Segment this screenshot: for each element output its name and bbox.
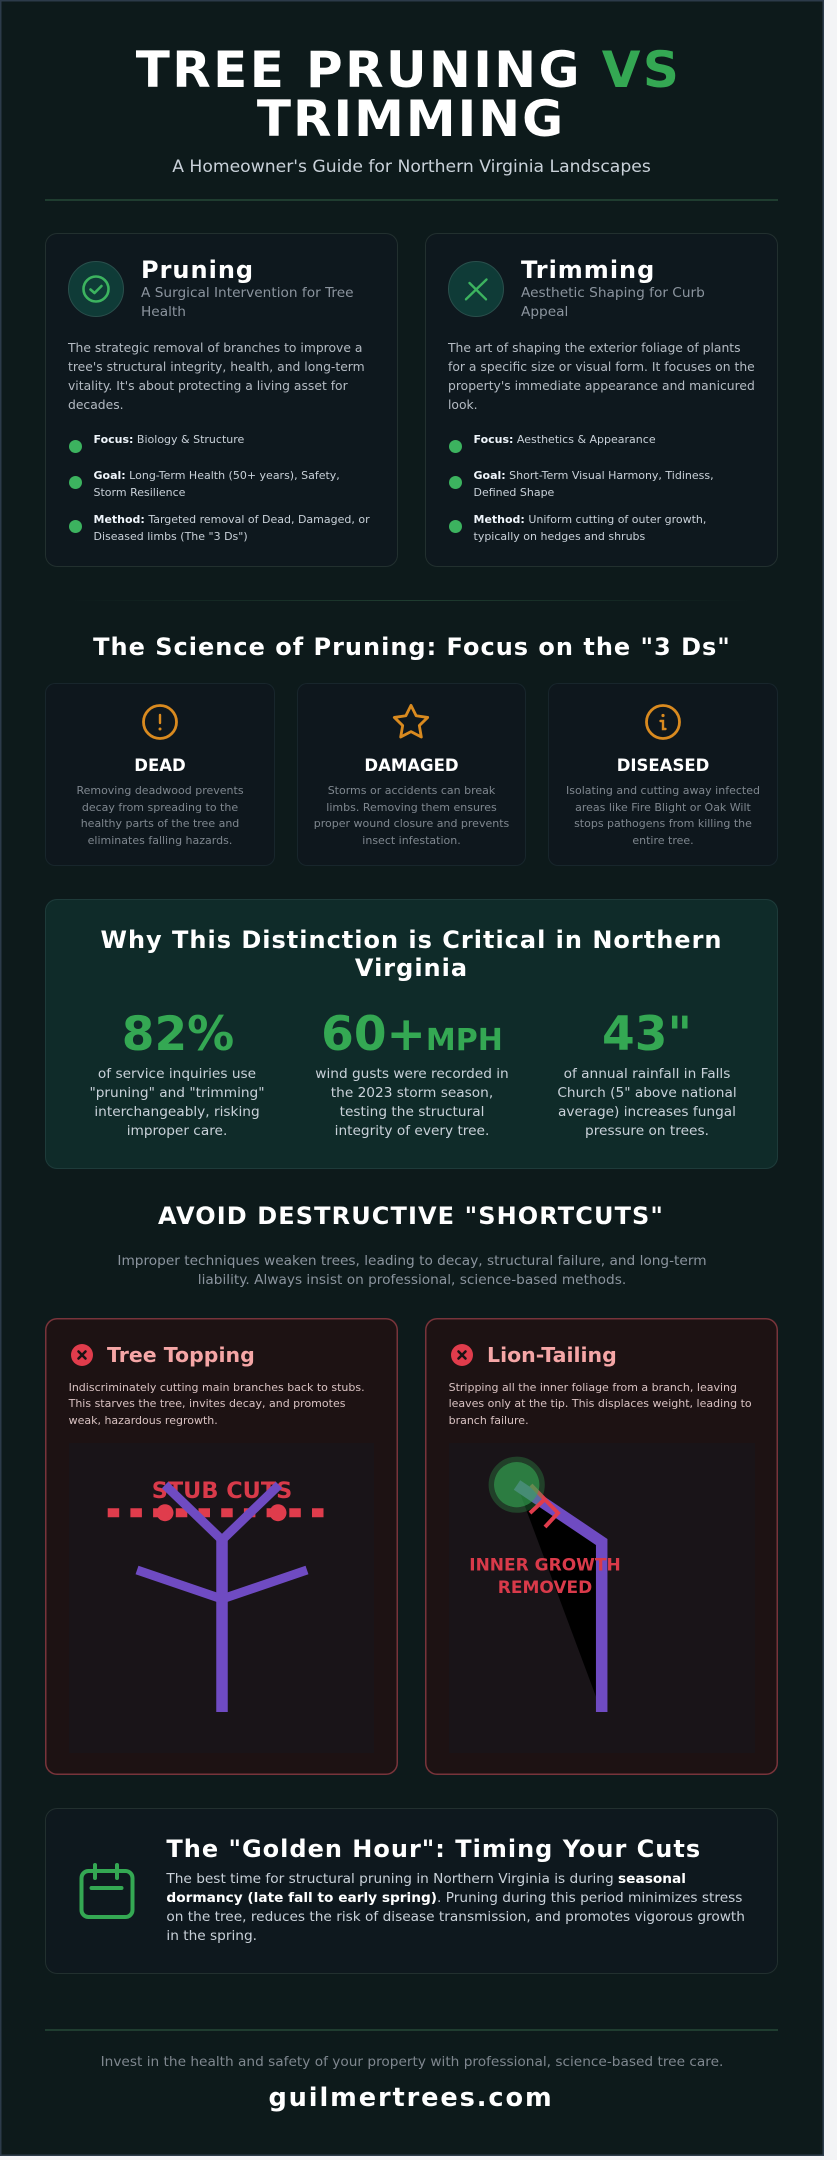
heading: the 3 Ds: The Science of Pruning: Focus on the "3 Ds" <box>93 633 731 661</box>
description: pruning: decades. <box>68 398 124 412</box>
description: diseased: stops pathogens from killing the <box>574 817 752 830</box>
bullet: focus: Focus: Biology & Structure <box>94 433 244 446</box>
bullet dot <box>68 440 82 453</box>
heading: critical: Virginia <box>355 954 468 982</box>
bullet: method: Method: Targeted removal of Dead, Damaged, or <box>94 513 370 526</box>
bullet: method <box>94 513 370 542</box>
description: lion-tailing: branch failure. <box>449 1414 529 1426</box>
icon: crossed shears <box>448 261 504 317</box>
stat caption: service inquiries: improper care. <box>127 1123 227 1139</box>
bullet: goal <box>94 469 340 498</box>
stat caption: annual rainfall: average) increases fungal <box>558 1104 736 1120</box>
panel: diseased <box>548 683 778 866</box>
bullet: method: typically on hedges and shrubs <box>474 530 645 542</box>
label: inner growth removed: INNER GROWTH <box>469 1556 621 1576</box>
description: dead: healthy parts of the tree and <box>81 817 239 830</box>
footer <box>101 2054 723 2113</box>
description: damaged <box>314 784 509 846</box>
description: dead: decay from spreading to the <box>82 800 238 814</box>
footer note: Invest in the health and safety of your property with professional, science-based tree care. <box>101 2054 723 2070</box>
title <box>136 41 681 148</box>
tagline: trimming: Appeal <box>521 304 568 320</box>
description: lion-tailing: Stripping all the inner foliage from a branch, leaving <box>449 1380 737 1394</box>
description: diseased <box>566 784 760 846</box>
heading: pruning: Pruning <box>141 256 254 284</box>
stat caption: annual rainfall: Church (5" above national <box>557 1085 737 1101</box>
description: diseased: entire tree. <box>632 834 694 846</box>
description: golden hour: The best time for structural pruning in Northern Virginia is during seasonal <box>166 1870 686 1886</box>
panel: pruning <box>45 233 398 567</box>
heading: critical <box>100 926 723 982</box>
heading: tree topping: Tree Topping <box>107 1343 255 1367</box>
stat: 82%: 82% <box>122 1006 234 1062</box>
heading: golden hour: The "Golden Hour": Timing Your Cuts <box>166 1835 701 1863</box>
description: tree topping: weak, hazardous regrowth. <box>69 1414 218 1426</box>
icon: star <box>392 704 430 738</box>
icon: alert circle <box>142 704 178 740</box>
heading: lion-tailing: Lion-Tailing <box>487 1343 617 1367</box>
icon: x circle <box>451 1344 473 1366</box>
heading: critical: Why This Distinction is Critical in Northern <box>100 926 723 954</box>
bullet: method: Diseased limbs (The "3 Ds") <box>94 530 248 542</box>
branch <box>517 1485 602 1712</box>
description: diseased: Isolating and cutting away infected <box>566 784 760 797</box>
cut marks <box>530 1485 558 1527</box>
bullet dot <box>448 520 462 532</box>
title: TRIMMING <box>257 90 565 148</box>
description: pruning <box>68 341 365 412</box>
description: golden hour: in the spring. <box>166 1928 257 1944</box>
icon: check circle <box>68 261 124 317</box>
description: dead: Removing deadwood prevents <box>76 784 244 797</box>
bullet dot <box>68 520 82 532</box>
description: damaged: limbs. Removing them ensures <box>326 800 497 814</box>
bullet: focus: Focus: Aesthetics & Appearance <box>474 433 656 446</box>
panel: dead <box>45 683 275 866</box>
panel: tree topping <box>45 1318 398 1775</box>
stat caption: annual rainfall <box>557 1066 737 1139</box>
description: dead <box>76 784 244 846</box>
description: tree topping: This starves the tree, invites decay, and promotes <box>69 1397 345 1410</box>
bullet dot <box>448 440 462 453</box>
panel: damaged <box>297 683 526 866</box>
description: diseased: areas like Fire Blight or Oak Wilt <box>575 800 751 814</box>
cut markers <box>156 1504 286 1521</box>
description: golden hour: dormancy (late fall to early spring). Pruning during this period minimizes stress <box>166 1890 742 1906</box>
stat caption: service inquiries: "pruning" and "trimming" <box>89 1085 265 1101</box>
label: diseased: DISEASED <box>617 756 709 775</box>
description: damaged: Storms or accidents can break <box>328 784 495 797</box>
stat: 60+ MPH: 60+MPH <box>321 1006 503 1062</box>
label: damaged: DAMAGED <box>364 756 459 775</box>
stat caption: wind gusts: integrity of every tree. <box>335 1123 489 1139</box>
intro text: avoid shortcuts <box>117 1253 707 1288</box>
description: trimming: look. <box>448 398 478 412</box>
panel: lion-tailing <box>425 1318 778 1775</box>
description: trimming: The art of shaping the exterior foliage of plants <box>448 341 741 355</box>
icon: info circle <box>645 704 681 740</box>
bullet: method: Method: Uniform cutting of outer growth, <box>474 513 706 526</box>
icon: x circle <box>71 1344 93 1366</box>
title: TREE PRUNING VS <box>136 41 681 99</box>
cut line <box>108 1508 324 1517</box>
website: guilmertrees.com <box>268 2083 554 2113</box>
stat: 43 inches: 43" <box>602 1006 692 1062</box>
tagline: pruning: A Surgical Intervention for Tree <box>141 285 354 301</box>
stat caption: wind gusts: wind gusts were recorded in <box>315 1066 509 1082</box>
stat caption: annual rainfall: pressure on trees. <box>585 1123 709 1139</box>
bullet: method <box>474 513 706 542</box>
label: stub cuts: STUB CUTS <box>152 1478 292 1504</box>
bullet: goal <box>474 469 714 498</box>
description: dead: eliminates falling hazards. <box>88 834 232 846</box>
bullet dot <box>68 476 82 488</box>
intro text: avoid shortcuts: liability. Always insist on professional, science-based methods. <box>198 1272 626 1288</box>
stat caption: service inquiries: interchangeably, risking <box>94 1104 260 1120</box>
foliage tuft <box>491 1459 542 1510</box>
description: lion-tailing: leaves only at the tip. This displaces weight, leading to <box>449 1397 752 1410</box>
stat caption: annual rainfall: of annual rainfall in Falls <box>564 1066 730 1082</box>
description: pruning: The strategic removal of branches to improve a <box>68 341 362 355</box>
description: tree topping: Indiscriminately cutting main branches back to stubs. <box>69 1380 365 1394</box>
description: golden hour <box>166 1870 745 1944</box>
icon: calendar <box>80 1863 134 1919</box>
panel: golden hour <box>45 1808 778 1974</box>
description: trimming: property's immediate appearance and manicured <box>448 379 755 393</box>
description: pruning: vitality. It's about protecting a living asset for <box>68 379 348 393</box>
tagline: pruning <box>141 285 354 320</box>
heading: avoid shortcuts: AVOID DESTRUCTIVE "SHORTCUTS" <box>158 1202 664 1230</box>
description: golden hour: on the tree, reduces the risk of disease transmission, and promotes vigorous growth <box>166 1909 745 1925</box>
bullet: goal: Goal: Long-Term Health (50+ years), Safety, <box>94 469 340 482</box>
description: damaged: proper wound closure and prevents <box>314 817 509 830</box>
description: trimming: for a specific size or visual form. It focuses on the <box>448 360 755 374</box>
label: dead: DEAD <box>134 756 186 775</box>
bullet dot <box>448 476 462 488</box>
stat caption: wind gusts: testing the structural <box>340 1104 484 1120</box>
stat caption: wind gusts: the 2023 storm season, <box>331 1085 493 1101</box>
stat caption: service inquiries <box>89 1066 265 1139</box>
description: lion-tailing <box>449 1380 752 1426</box>
intro text: avoid shortcuts: Improper techniques weaken trees, leading to decay, structural failure, and long-term <box>117 1253 707 1269</box>
stat caption: wind gusts <box>315 1066 509 1139</box>
diagram: tree topping <box>108 1478 324 1712</box>
bullet: goal: Storm Resilience <box>94 486 185 498</box>
diagram: lion-tailing <box>469 1456 621 1712</box>
panel: trimming <box>425 233 778 567</box>
panel: why this distinction is critical <box>45 899 778 1169</box>
tagline: trimming: Aesthetic Shaping for Curb <box>521 285 705 301</box>
description: pruning: tree's structural integrity, health, and long-term <box>68 360 365 374</box>
tagline: pruning: Health <box>141 304 186 320</box>
label: inner growth removed: REMOVED <box>498 1578 592 1598</box>
description: damaged: insect infestation. <box>362 834 461 846</box>
subtitle: A Homeowner's Guide for Northern Virginia Landscapes <box>172 157 651 177</box>
bullet: goal: Goal: Short-Term Visual Harmony, Tidiness, <box>474 469 714 482</box>
bullet: goal: Defined Shape <box>474 486 554 498</box>
tagline: trimming <box>521 285 705 320</box>
header: title and subtitle <box>136 41 681 177</box>
heading: trimming: Trimming <box>521 256 655 284</box>
stat caption: service inquiries: of service inquiries use <box>98 1066 256 1082</box>
tree <box>137 1485 307 1712</box>
description: trimming <box>448 341 755 412</box>
description: tree topping <box>68 1380 365 1426</box>
